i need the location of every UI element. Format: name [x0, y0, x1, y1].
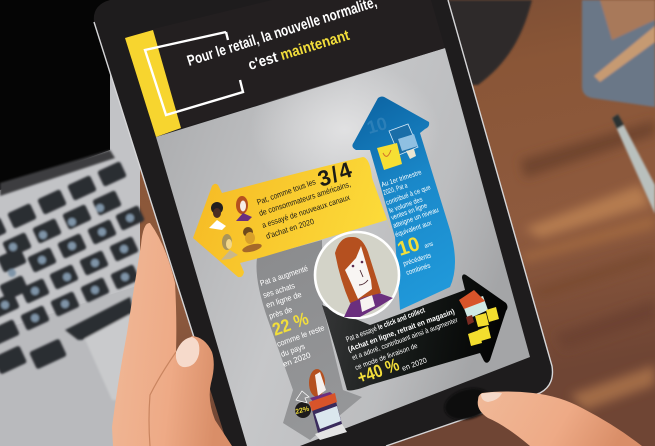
- text: three quarters of consumers: [256, 157, 355, 241]
- icon: web window: [389, 124, 418, 159]
- laptop: [0, 0, 144, 446]
- text: ten years of online sales: [380, 169, 440, 277]
- text: online purchases: 22 %: [270, 308, 311, 340]
- text: three quarters of consumers: de consommateurs américains,: [258, 180, 352, 218]
- panel: grey down arrow: [256, 240, 362, 440]
- tablet edge highlight: [94, 0, 552, 446]
- text: ten years of online sales: équivalent aux: [394, 220, 433, 239]
- right thumbnail: [481, 392, 502, 402]
- text: ten years of online sales: combinés: [405, 262, 432, 277]
- text: click and collect: ce mode de livraison de: [354, 343, 419, 372]
- text: ten years of online sales: précédents: [402, 252, 433, 268]
- text: online purchases: Pat a augmenté: [259, 264, 310, 288]
- text: online purchases: [259, 264, 326, 369]
- yellow accent bar: [125, 30, 181, 137]
- text: click and collect: Pat a essayé le click and collect: [344, 305, 426, 344]
- text: ten years of online sales: 10: [395, 233, 422, 261]
- text: ten years of online sales: ventes en ligne: [390, 202, 428, 222]
- icon: faded 10 ans: 10: [365, 113, 389, 138]
- pen on the desk: [612, 114, 655, 214]
- left thumbnail: [176, 337, 199, 367]
- right hand: [478, 392, 642, 446]
- text: ten years of online sales: ans: [424, 241, 434, 250]
- screen highlight: [250, 60, 440, 200]
- text: ten years of online sales: atteigne un niveau: [392, 207, 440, 230]
- blue tile with wooden sticks: [582, 0, 655, 107]
- text: online purchases: en 2020: [282, 350, 312, 369]
- icon: Pat with store: 22%: [295, 406, 311, 416]
- tablet body: [94, 0, 553, 446]
- text: online purchases: du pays: [280, 342, 306, 359]
- text: ten years of online sales: 2020, Pat a: [382, 182, 408, 197]
- finger crease: [149, 352, 176, 446]
- icon: shop with bags: [459, 290, 499, 346]
- tablet screen: [156, 48, 530, 446]
- text: click and collect: +40 %: [355, 354, 402, 388]
- text: three quarters of consumers: Pat, comme tous les: [256, 177, 317, 207]
- dark object behind the tablet: [440, 0, 532, 85]
- title: c'est maintenant: [246, 27, 352, 74]
- panel: yellow left arrow: [193, 157, 393, 277]
- text: three quarters of consumers: d'achat en 2020: [265, 217, 316, 241]
- icon: Pat with store: [295, 369, 347, 440]
- text: click and collect: (Achat en ligne, retrait en magasin): [347, 307, 456, 354]
- text: click and collect: en 2020: [401, 356, 428, 373]
- text: ten years of online sales: le volume des: [388, 196, 424, 215]
- text: ten years of online sales: Au 1er trimestre: [380, 169, 423, 189]
- text: ten years of online sales: contribué à ce que: [385, 184, 432, 207]
- panel: black right arrow: [322, 274, 508, 390]
- icon: four consumers: [209, 196, 263, 260]
- text: three quarters of consumers: 3/4: [314, 157, 355, 192]
- header band: [153, 0, 445, 128]
- home button: [441, 383, 495, 425]
- text: online purchases: comme le reste: [276, 323, 326, 349]
- text: online purchases: près de: [268, 305, 294, 321]
- text: click and collect: [344, 305, 459, 388]
- text: three quarters of consumers: a essayé de nouveaux canaux: [261, 193, 351, 230]
- text: click and collect: et a adoré, contribuant ainsi à augmenter: [351, 317, 459, 362]
- text: online purchases: ses achats: [262, 281, 296, 300]
- panel: blue up arrow: [352, 96, 455, 310]
- left hand: [112, 223, 232, 446]
- icon: shopping bag: [377, 143, 402, 170]
- title frame: [145, 32, 243, 115]
- text: online purchases: en ligne de: [265, 290, 303, 310]
- portrait: Pat: [315, 232, 399, 318]
